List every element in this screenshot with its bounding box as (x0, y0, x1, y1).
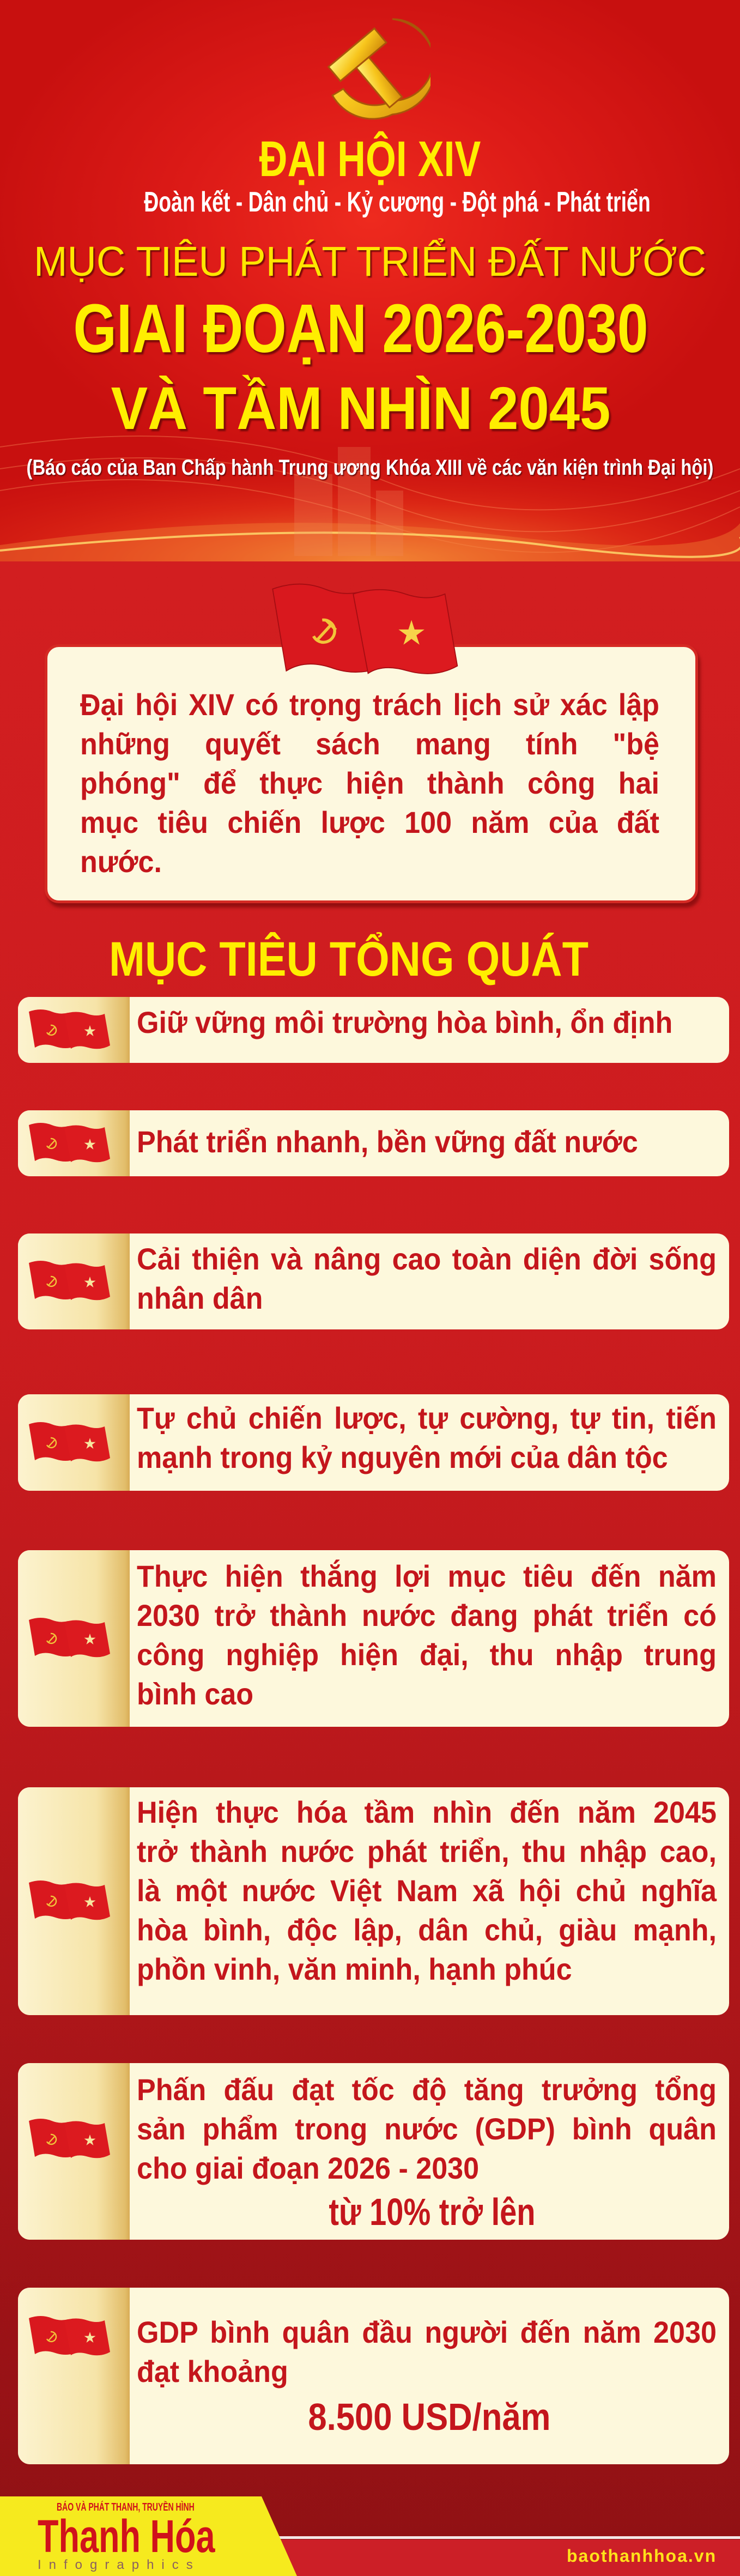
logo: Thanh Hóa: Infographics (38, 2557, 201, 2572)
subtitle: (Báo cáo của Ban Chấp hành Trung ương Khóa XIII về các văn kiện trình Đại hội) (27, 456, 713, 480)
text: item 8: đạt khoảng (137, 2354, 288, 2388)
text: item 8 (137, 2313, 717, 2391)
header banner (0, 0, 740, 561)
item 1 (18, 997, 729, 1063)
text: item 7: sản phẩm trong nước (GDP) bình quân (137, 2112, 717, 2146)
text: item 6: hòa bình, độc lập, dân chủ, giàu mạnh, (137, 1913, 717, 1947)
text: item 4: Tự chủ chiến lược, tự cường, tự tin, tiến (137, 1401, 717, 1435)
item 3 (18, 1233, 729, 1329)
text: item 1: Giữ vững môi trường hòa bình, ổn định (137, 1005, 672, 1039)
text: intro: phóng" để thực hiện thành công hai (80, 766, 659, 800)
title line 1: MỤC TIÊU PHÁT TRIỂN ĐẤT NƯỚC (34, 238, 706, 285)
text: intro (80, 687, 659, 879)
heading: Đại hội XIV: ĐẠI HỘI XIV (259, 131, 481, 187)
value: item 7: từ 10% trở lên (329, 2191, 536, 2233)
text: item 3 (137, 1242, 717, 1315)
icon: flags (29, 1618, 110, 1657)
item 8 (18, 2288, 729, 2464)
item 2 (18, 1110, 729, 1176)
icon: flags (27, 2315, 114, 2359)
icon: flags (29, 1009, 110, 1049)
text: intro: Đại hội XIV có trọng trách lịch sử xác lập (80, 687, 659, 722)
text: item 3: nhân dân (137, 1281, 263, 1315)
text: intro: mục tiêu chiến lược 100 năm của đất (80, 805, 659, 839)
text: item 4 (137, 1401, 717, 1474)
text: item 5: Thực hiện thắng lợi mục tiêu đến năm (137, 1559, 717, 1593)
logo: Thanh Hóa: Thanh Hóa (38, 2511, 215, 2562)
icon: hammer and sickle (327, 19, 430, 120)
item 4 (18, 1394, 729, 1491)
panel: intro (45, 644, 698, 903)
text: item 6: là một nước Việt Nam xã hội chủ nghĩa (137, 1873, 717, 1908)
title line 2: GIAI ĐOẠN 2026-2030 (73, 290, 648, 367)
text: item 7: Phấn đấu đạt tốc độ tăng trưởng tổng (137, 2072, 717, 2107)
item 5 (18, 1550, 729, 1727)
slogan: Đoàn kết - Dân chủ - Kỷ cương - Đột phá - Phát triển (144, 186, 651, 218)
footer (0, 2494, 740, 2576)
text: item 6: Hiện thực hóa tầm nhìn đến năm 2045 (137, 1795, 717, 1829)
text: item 2: Phát triển nhanh, bền vững đất nước (137, 1124, 638, 1159)
text: item 6: phồn vinh, văn minh, hạnh phúc (137, 1952, 572, 1986)
heading: Mục tiêu tổng quát: MỤC TIÊU TỔNG QUÁT (109, 932, 589, 986)
text: intro: những quyết sách mang tính "bệ (80, 727, 659, 761)
icon: flags (29, 1261, 110, 1301)
item 6 (18, 1787, 729, 2015)
text: item 8: GDP bình quân đầu người đến năm 2030 (137, 2315, 717, 2349)
text: item 5: công nghiệp hiện đại, thu nhập trung (137, 1637, 717, 1672)
text: item 5: bình cao (137, 1677, 253, 1711)
website: baothanhhoa.vn (567, 2546, 717, 2566)
text: item 7: cho giai đoạn 2026 - 2030 (137, 2151, 479, 2185)
icon: intro flags (272, 583, 458, 674)
text: item 5: 2030 trở thành nước đang phát triển có (137, 1598, 717, 1632)
text: item 4: mạnh trong kỷ nguyên mới của dân tộc (137, 1440, 668, 1474)
icon: flags (29, 2119, 110, 2158)
icon: flags (29, 1880, 110, 1920)
text: item 7 (137, 2070, 717, 2188)
icon: flags (29, 1422, 110, 1462)
item 7 (18, 2063, 729, 2240)
icon: flags (29, 1123, 110, 1162)
text: item 3: Cải thiện và nâng cao toàn diện đời sống (137, 1242, 717, 1276)
logo: Thanh Hóa (38, 2501, 223, 2572)
logo: Thanh Hóa: BÁO VÀ PHÁT THANH, TRUYỀN HÌNH (57, 2501, 195, 2513)
text: item 6 (137, 1795, 717, 1986)
value: item 8: 8.500 USD/năm (308, 2396, 551, 2438)
title line 3: VÀ TẦM NHÌN 2045 (111, 375, 610, 442)
text: item 6: trở thành nước phát triển, thu nhập cao, (137, 1834, 717, 1868)
text: intro: nước. (80, 844, 162, 879)
text: item 5 (137, 1559, 717, 1711)
